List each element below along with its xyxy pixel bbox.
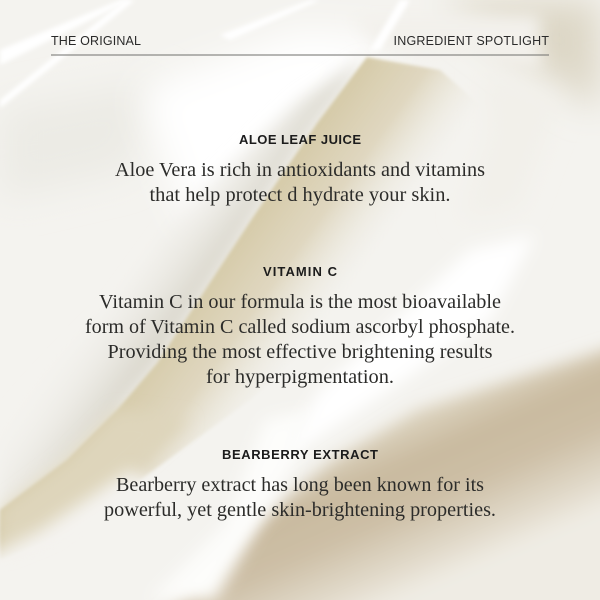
description: powerful, yet gentle skin-brightening properties. bbox=[104, 499, 496, 521]
soften right of band bbox=[460, 70, 560, 220]
heading: ALOE LEAF JUICE bbox=[239, 132, 361, 147]
section label: INGREDIENT SPOTLIGHT bbox=[394, 34, 549, 48]
description: Providing the most effective brightening results bbox=[108, 341, 493, 363]
white shine lower bbox=[166, 420, 290, 600]
tan band bbox=[0, 56, 462, 557]
ingredient: vitamin c bbox=[85, 264, 515, 388]
brown sweep bbox=[160, 345, 600, 600]
soften bottom of band bbox=[0, 466, 146, 562]
brand label: THE ORIGINAL bbox=[51, 34, 141, 48]
grey shade beside band bbox=[0, 57, 367, 510]
description: that help protect d hydrate your skin. bbox=[150, 184, 450, 206]
heading: VITAMIN C bbox=[263, 264, 338, 279]
top right shade bbox=[440, 0, 600, 110]
soften top of band bbox=[462, 11, 546, 67]
description: Vitamin C in our formula is the most bioavailable bbox=[99, 291, 501, 313]
description: Bearberry extract has long been known for its bbox=[116, 474, 484, 496]
white shine middle bbox=[304, 240, 526, 442]
ingredient: aloe leaf juice bbox=[115, 132, 485, 206]
ingredient: bearberry extract bbox=[104, 447, 496, 521]
description: form of Vitamin C called sodium ascorbyl phosphate. bbox=[85, 316, 515, 338]
upper left soft shade bbox=[17, 106, 128, 174]
bright center bbox=[144, 34, 370, 200]
description: for hyperpigmentation. bbox=[206, 366, 394, 388]
tan band lower left bbox=[0, 409, 131, 543]
heading: BEARBERRY EXTRACT bbox=[222, 447, 378, 462]
header bbox=[51, 34, 549, 56]
description: Aloe Vera is rich in antioxidants and vitamins bbox=[115, 159, 485, 181]
white streaks top left bbox=[0, 1, 120, 63]
